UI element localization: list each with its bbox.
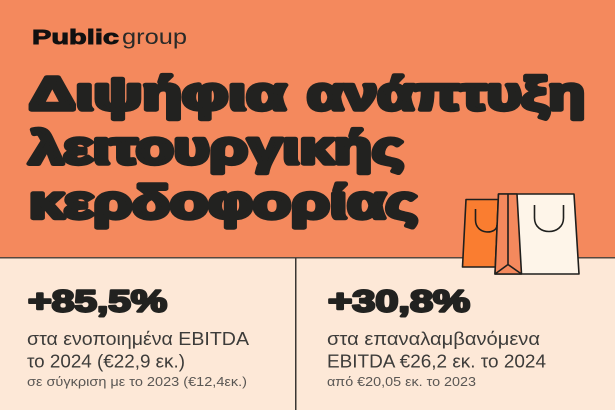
cream bag (495, 194, 579, 274)
bag gusset (495, 194, 522, 274)
stat: left: το 2024 (€22,9 εκ.) (27, 352, 185, 372)
title: Διψήφια (29, 68, 286, 120)
logo: Public group (32, 26, 187, 49)
divider line (0, 257, 615, 258)
title: λειτουργικής (29, 122, 404, 174)
stat: left: στα ενοποιημένα EBITDA (27, 329, 249, 349)
logo: Public group: Public (32, 26, 119, 49)
stat: right: EBITDA €26,2 εκ. το 2024 (327, 352, 546, 372)
title (29, 68, 585, 228)
stat: right: +30,8% (328, 284, 470, 318)
logo: Public group: group (122, 26, 187, 49)
panel: orange header (0, 0, 615, 258)
panel: cream footer (0, 258, 615, 410)
stat: left: +85,5% (28, 284, 167, 318)
orange bag (462, 200, 499, 267)
title: ανάπτυξη (307, 68, 585, 120)
icon: shopping bags (462, 194, 579, 274)
stat: right: στα επαναλαμβανόμενα (327, 329, 540, 349)
column separator (295, 258, 296, 410)
stat: right (327, 284, 546, 389)
stat: left: σε σύγκριση με το 2023 (€12,4εκ.) (27, 374, 247, 389)
stat: left (27, 284, 249, 389)
stat: right: από €20,05 εκ. το 2023 (327, 374, 476, 389)
title: κερδοφορίας (29, 176, 418, 228)
